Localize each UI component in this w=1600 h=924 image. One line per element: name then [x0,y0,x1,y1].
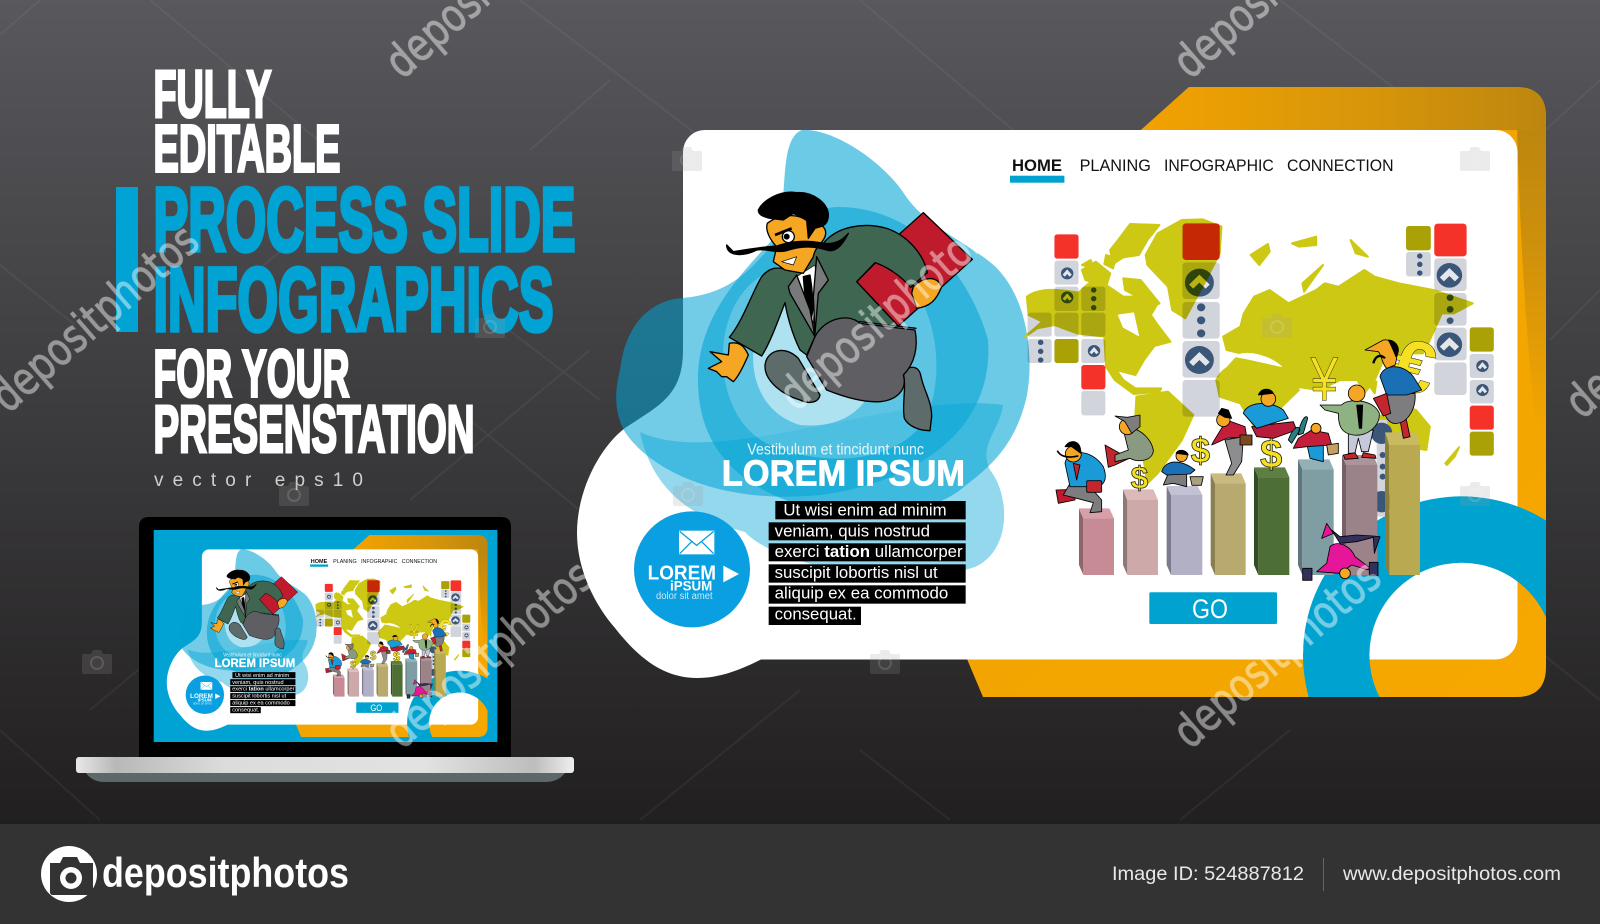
bar 5 [1254,467,1289,575]
figure 6 [1293,423,1338,462]
body text with black highlights: Ut wisi enim ad minim [783,501,947,520]
figure 7 [1320,385,1379,459]
body text with black highlights: veniam, quis nostrud [775,522,930,541]
figures on bars [1056,340,1422,580]
go button [1149,592,1277,624]
laptop screen [154,530,497,742]
figure 2 [1105,415,1153,467]
laptop [76,517,574,782]
bar 3 [1167,486,1202,575]
progress tiles [1028,223,1494,456]
footer bar [0,824,1600,924]
bar chart and figures [1056,322,1444,580]
title block [116,57,576,491]
icon: envelope [679,531,714,554]
world map [1025,219,1473,483]
body text with black highlights: suscipit lobortis nisl ut [775,563,938,582]
body text with black highlights: consequat. [775,604,857,623]
dollar symbol 3: $ [1260,432,1282,476]
image id: Image ID: 524887812 [1112,863,1304,885]
footer url: www.depositphotos.com [1342,863,1561,885]
figure 3 [1162,450,1203,487]
laptop base underside [86,773,565,782]
dollar symbol 1: $ [1131,459,1149,495]
character: running businessman [708,192,972,431]
laptop screen slide copy [167,535,512,776]
blue ring [1303,496,1600,814]
go button: GO [1192,594,1228,624]
watermark laptop: depositphotos [374,550,603,758]
footer divider [1323,858,1324,891]
nav infographic: INFOGRAPHIC [1164,156,1274,175]
laptop bezel [139,517,511,757]
title line: for your: FOR YOUR [154,336,350,412]
title line: fully: FULLY [154,57,272,132]
nav planing: PLANING [1080,156,1151,175]
body text with black highlights: exerci tation ullamcorper [775,542,963,561]
badge heading: LOREM [648,562,716,584]
white blob [577,350,830,678]
yen symbol: ¥ [1310,344,1339,413]
body text with black highlights: aliquip ex ea commodo [775,583,948,602]
orange frame [967,87,1546,697]
bar 8 [1385,432,1420,575]
bar 1 [1079,508,1114,575]
title line: editable: EDITABLE [154,112,340,186]
figure 5 [1243,389,1308,443]
badge subheading: iPSUM [670,577,712,593]
red folder [857,213,972,326]
watermark lower right: depositphotos [1162,550,1391,758]
dollar symbol 2: $ [1191,432,1210,471]
camera watermarks [82,147,1490,674]
subtitle: vector eps10 [154,470,363,491]
back tile column [1371,420,1392,517]
blue blobs [616,130,1030,577]
body text with black highlights [769,501,966,625]
footer logo wordmark: depositphotos [102,849,349,896]
title line: presentation: PRESENSTATION [154,392,474,467]
bar 2 [1123,489,1158,575]
slide heading: LOREM IPSUM [722,453,965,494]
navigation [1010,156,1394,183]
main slide [577,87,1600,814]
footer logo icon [41,846,97,902]
nav home: HOME [1012,156,1062,175]
white card [683,130,1518,660]
bar 6 [1298,459,1334,575]
nav underline [1010,176,1064,183]
figure 9 upside-down [1303,523,1380,580]
laptop base [76,757,574,773]
title line: infographics: INFOGRAPHICS [154,250,554,350]
icon: play arrow [723,566,739,582]
figure 8 [1365,340,1422,438]
badge small text: dolor sit amet [656,591,713,602]
badge: lorem ipsum mail [634,511,750,627]
accent bar [116,187,138,332]
euro symbol: € [1384,322,1444,411]
bar 4 [1211,473,1246,575]
nav connection: CONNECTION [1287,156,1394,175]
bar 7 [1342,455,1377,575]
figure 4 [1212,408,1252,475]
watermark center: depositphotos [768,212,997,420]
figure 1 [1056,442,1105,513]
title line: process slide: PROCESS SLIDE [154,170,576,270]
small caption: Vestibulum et tincidunt nunc [747,441,924,458]
currency symbols [1131,322,1444,495]
